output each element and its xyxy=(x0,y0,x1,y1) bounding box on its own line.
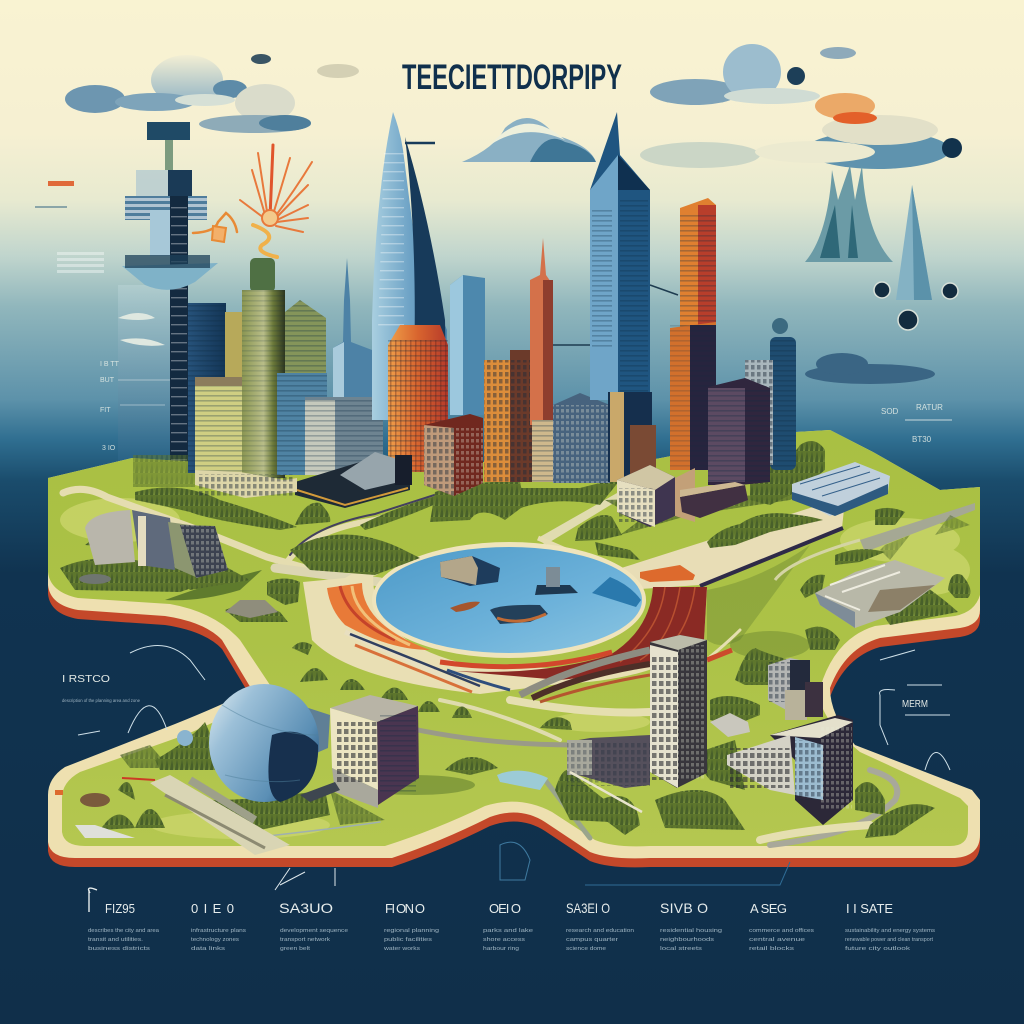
cloud: dark slate right xyxy=(805,353,935,384)
footer body text: describes the city and area xyxy=(88,928,159,934)
footer body text: renewable power and clean transport xyxy=(845,937,934,943)
footer body text: campus quarter xyxy=(566,937,618,943)
annotation: left dark panel label: I RSTCO xyxy=(62,674,110,685)
blue roof pavilion xyxy=(792,462,890,516)
column 8 heading: A SEG xyxy=(750,901,787,916)
cloud: top left xyxy=(65,55,247,113)
small annotation marks xyxy=(35,181,104,274)
city: blue slab xyxy=(450,275,485,415)
footer body text: infrastructure plans xyxy=(191,928,247,934)
city: red needle tower xyxy=(530,238,554,482)
annotation: left side labels: FIT xyxy=(100,407,111,414)
city: purple grey blocks xyxy=(708,360,773,485)
city: grey office block xyxy=(305,397,383,475)
annotation: right side labels: BT30 xyxy=(912,435,932,444)
city: left dark blue block xyxy=(188,303,226,473)
city: tall blue spire xyxy=(372,112,447,420)
observation tower xyxy=(118,122,218,472)
cloud: small tan xyxy=(317,64,359,78)
footer body text: retail blocks xyxy=(749,946,795,952)
cream office building by globe xyxy=(330,695,419,808)
footer body text: business districts xyxy=(88,946,151,952)
left upper road xyxy=(63,489,450,582)
right lower buildings xyxy=(768,658,823,720)
small marks on lower lobe xyxy=(55,771,548,838)
annotation: left side labels: 3 IO xyxy=(102,445,116,452)
city: amber tower xyxy=(484,350,534,482)
lower roads xyxy=(250,630,897,845)
annotation: right side labels: SOD xyxy=(881,407,899,416)
column 9 heading: I I SATE xyxy=(846,901,893,916)
footer body text: sustainability and energy systems xyxy=(845,928,936,934)
annotation: left side labels: BUT xyxy=(100,377,115,384)
footer body text: public facilities xyxy=(384,937,433,943)
footer body text: parks and lake xyxy=(483,928,533,934)
connector lines under island xyxy=(275,842,790,890)
footer body text: commerce and offices xyxy=(749,928,815,934)
column 2 heading: 0 I E 0 xyxy=(191,901,234,916)
footer columns xyxy=(89,888,893,916)
city: green main tower xyxy=(225,258,285,478)
footer body text: transport network xyxy=(280,937,331,943)
city: yellow block xyxy=(195,377,242,475)
footer body text: shore access xyxy=(483,937,526,943)
city: red-brown block xyxy=(424,414,483,496)
right upper road with dark underside xyxy=(538,493,975,590)
column 6 heading: SA3EI O xyxy=(566,900,610,916)
icon: column 1 hook xyxy=(89,888,97,912)
icon: small dark bird xyxy=(251,54,271,64)
annotation: left dark panel label xyxy=(62,645,205,735)
cloud: top right xyxy=(650,44,856,105)
city: low dark complex xyxy=(295,452,412,508)
footer body text: harbour ring xyxy=(483,946,519,952)
cream low block xyxy=(617,465,675,527)
city: thin blue spire xyxy=(333,258,372,398)
tree bands xyxy=(60,441,970,838)
right grey complex xyxy=(815,560,945,628)
annotation: right side labels xyxy=(881,403,952,444)
boats in lake xyxy=(440,556,578,624)
footer body text: residential housing xyxy=(660,928,722,934)
footer body text: local streets xyxy=(660,946,703,952)
footer body text: water works xyxy=(384,946,421,952)
tan low complex xyxy=(675,468,748,522)
annotation: left dark panel label: description of the planning area and zone xyxy=(62,698,140,703)
sunburst xyxy=(193,145,312,257)
column 1 heading: FIZ95 xyxy=(105,901,135,916)
wire lines between towers xyxy=(553,285,678,345)
terrain highlights xyxy=(60,498,970,839)
city: blue mid tower xyxy=(277,373,327,475)
city: olive grid tower xyxy=(285,300,326,380)
globe dome xyxy=(177,684,330,802)
footer body text: green belt xyxy=(280,946,311,952)
cloud: upper left grey xyxy=(199,84,311,133)
city: terrace base xyxy=(195,470,297,498)
annotation: right side labels: RATUR xyxy=(916,403,943,412)
annotation: left side labels: I B TT xyxy=(100,361,120,368)
ramp bottom left xyxy=(150,775,340,855)
cloud: centre arch xyxy=(462,118,596,162)
grey tower lower centre xyxy=(650,635,707,788)
footer body text: future city outlook xyxy=(845,946,911,952)
small white block xyxy=(710,713,750,737)
column 3 heading: SA3UO xyxy=(279,900,333,916)
low grey block lower centre xyxy=(567,735,650,812)
footer body text: science dome xyxy=(566,946,606,952)
footer body text: neighbourhoods xyxy=(660,937,715,943)
footer body text xyxy=(88,928,936,952)
annotation: left side labels xyxy=(100,361,170,452)
city: tall dark blue tower xyxy=(590,112,656,482)
icons: three round badges xyxy=(874,282,958,330)
footer body text: technology zones xyxy=(191,937,240,943)
footer body text: transit and utilities. xyxy=(88,937,143,943)
right lower office cluster xyxy=(727,715,853,825)
lake xyxy=(372,542,646,658)
title: TEECIETTDORPIPY xyxy=(402,58,622,97)
city: grey blue block xyxy=(553,393,610,483)
orange barge xyxy=(640,565,695,582)
striped curve below lake right xyxy=(520,650,732,702)
annotation: right dark panel label: MERM xyxy=(902,699,928,710)
stadium stands around lake xyxy=(303,560,707,694)
annotation: right dark panel label xyxy=(880,650,950,770)
rail lines under stadium xyxy=(345,632,510,692)
footer body text: regional planning xyxy=(384,928,439,934)
footer body text: central avenue xyxy=(749,937,805,943)
footer body text: development sequence xyxy=(280,928,348,934)
dark terrain shadows xyxy=(165,545,810,795)
column 5 heading: OEI O xyxy=(489,901,521,916)
column 4 heading: FI ON O xyxy=(385,901,425,916)
column 7 heading: SIVB O xyxy=(660,900,708,916)
city: dark cylinder xyxy=(770,318,796,470)
city: orange tower xyxy=(388,325,448,472)
island base xyxy=(48,430,980,867)
footer body text: data links xyxy=(191,946,226,952)
city: orange red tower xyxy=(670,198,716,470)
left ruin buildings xyxy=(79,510,228,584)
footer body text: research and education xyxy=(566,928,634,934)
grey boulder xyxy=(225,600,278,618)
cloud: right with sun xyxy=(640,93,962,169)
distant spire cluster right xyxy=(805,165,932,300)
